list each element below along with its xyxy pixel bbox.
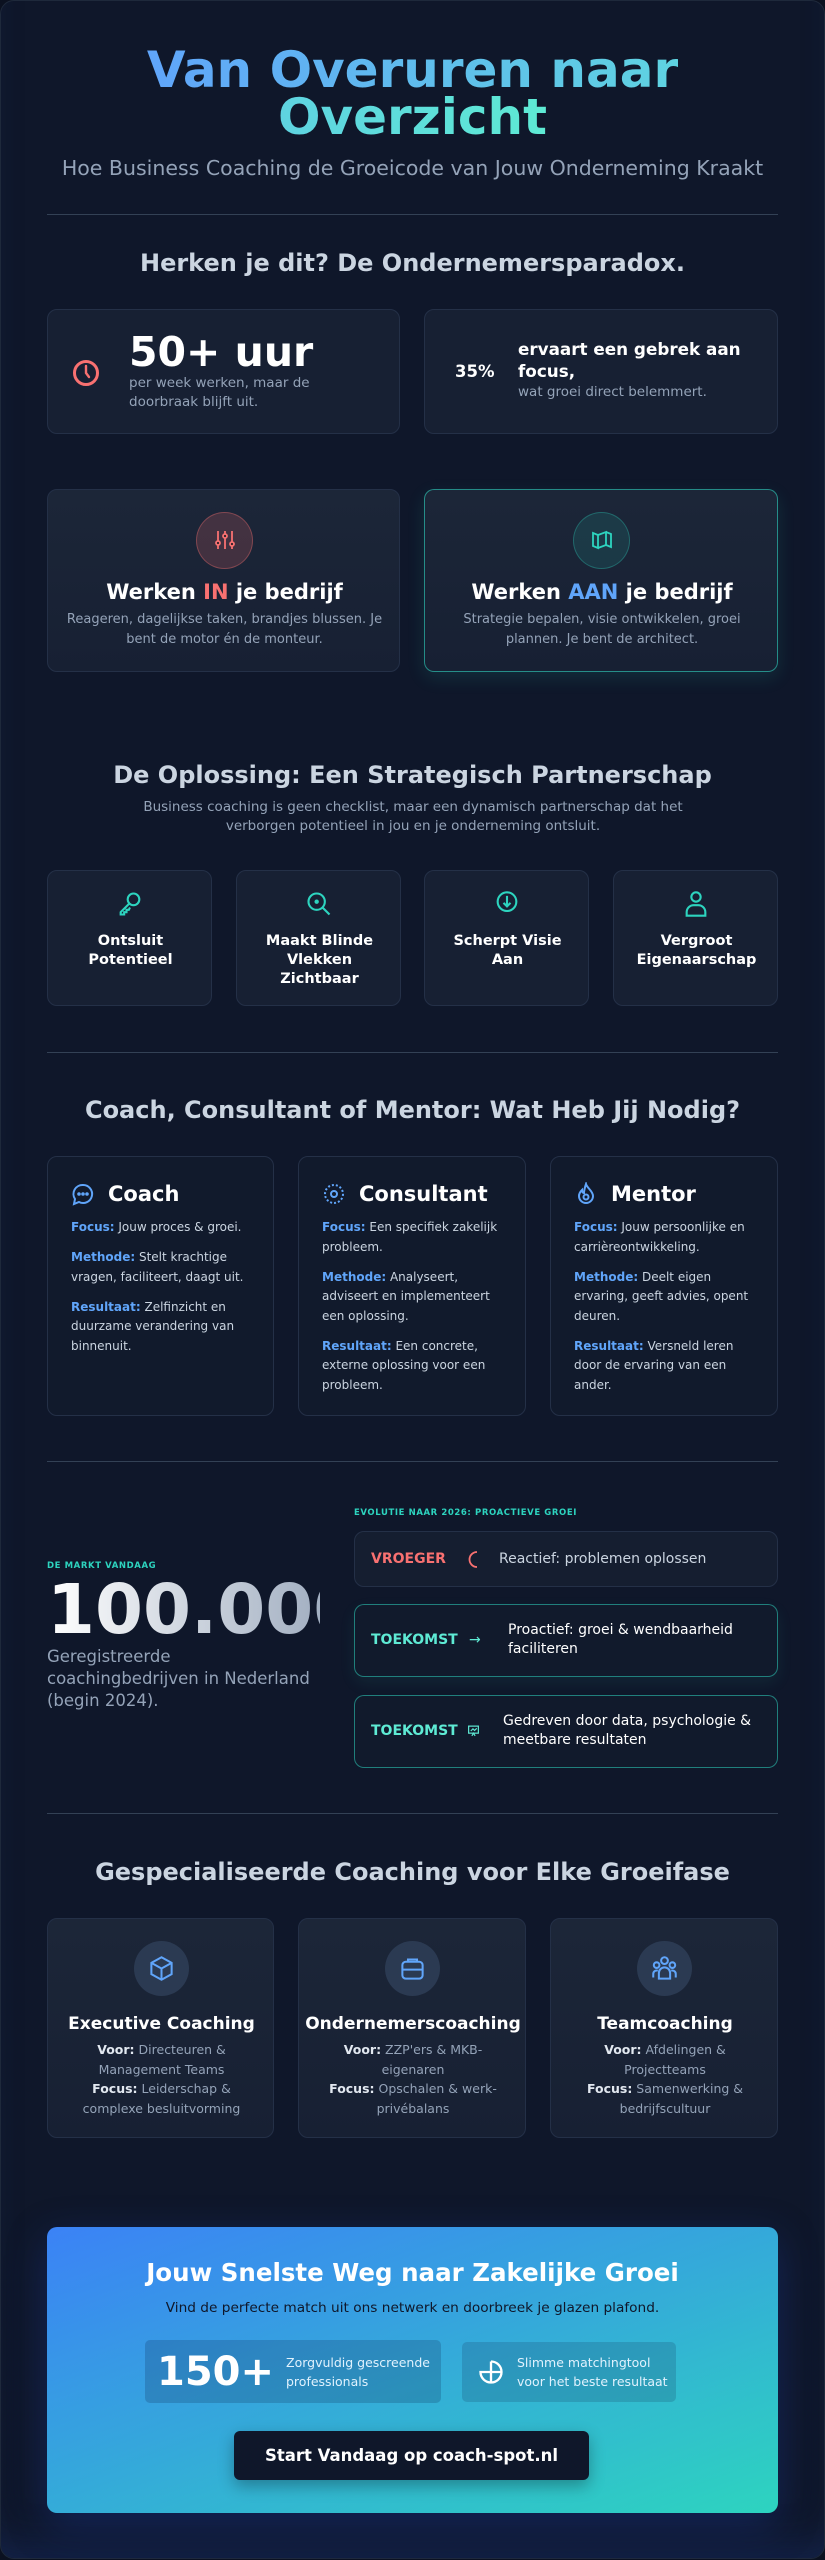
card: toekomst data: TOEKOMST [371, 1723, 458, 1739]
icon: person [686, 891, 706, 917]
stat box: 150+: 150+ [157, 2349, 274, 2395]
evolution timeline [354, 1508, 778, 1768]
icon: compass [496, 891, 518, 912]
stat box: matchingtool: Slimme matchingtool voor het beste resultaat [517, 2355, 668, 2389]
heading: Werken IN je bedrijf [106, 580, 343, 604]
details: Focus: Een specifiek zakelijk probleem. [322, 1220, 497, 1254]
card: werken IN [47, 489, 400, 672]
heading: Werken AAN je bedrijf [471, 580, 733, 604]
card: consultant [298, 1156, 526, 1416]
heading: gespecialiseerde coaching: Gespecialiseerde Coaching voor Elke Groeifase [95, 1858, 730, 1886]
label: Eigenaarschap [637, 952, 756, 968]
stat text: wat groei direct belemmert. [518, 384, 707, 400]
details: Resultaat: Een concrete, externe oplossing voor een probleem. [322, 1338, 485, 1392]
title: Ondernemerscoaching [305, 2014, 521, 2034]
icon: magnifier [307, 892, 330, 916]
details: Voor: ZZP'ers & MKB-eigenaren [344, 2042, 482, 2076]
card: toekomst proactief: → [469, 1632, 481, 1648]
stat text: focus, [518, 361, 575, 381]
details: Focus: Jouw persoonlijke en carrièreontwikkeling. [574, 1220, 745, 1254]
card: toekomst proactief: Proactief: groei & wendbaarheid faciliteren [508, 1622, 733, 1657]
heading: oplossing: De Oplossing: Een Strategisch Partnerschap [113, 761, 712, 789]
stat text [518, 339, 741, 400]
description [47, 1647, 310, 1710]
stat box: 150+: Zorgvuldig gescreende professionals [286, 2355, 430, 2389]
stat box: 150+ [145, 2340, 441, 2403]
card: 50+ uur [47, 309, 400, 434]
CTA heading: Jouw Snelste Weg naar Zakelijke Groei [146, 2258, 679, 2287]
CTA panel [47, 2227, 778, 2513]
label: Scherpt Visie [453, 933, 562, 949]
card: coach [47, 1156, 274, 1416]
label: Potentieel [88, 952, 173, 968]
card: vroeger: Reactief: problemen oplossen [499, 1551, 706, 1567]
subtitle: Hoe Business Coaching de Groeicode van Jouw Onderneming Kraakt [62, 156, 763, 180]
details [587, 2042, 743, 2116]
icon: sliders [196, 512, 253, 569]
card: toekomst data: Gedreven door data, psychologie & meetbare resultaten [503, 1713, 751, 1748]
label: DE MARKT VANDAAG [47, 1561, 156, 1571]
label: Vergroot [661, 933, 732, 949]
stat number: 35% [455, 362, 494, 381]
title: Van Overuren naar [147, 41, 678, 99]
label [637, 933, 756, 968]
card: visie [424, 870, 589, 1006]
label: Maakt Blinde [266, 933, 373, 949]
details: Voor: Afdelingen & Projectteams [604, 2042, 726, 2076]
card: ontsluit potentieel [47, 870, 212, 1006]
label [453, 933, 562, 968]
stat text: 50+ uur [129, 328, 313, 376]
heading: paradox: Herken je dit? De Ondernemersparadox. [140, 249, 685, 277]
title: Teamcoaching [597, 2014, 733, 2034]
icon: map [573, 512, 630, 569]
details: Resultaat: Zelfinzicht en duurzame verandering van binnenuit. [71, 1300, 234, 1352]
intro text: Business coaching is geen checklist, maar een dynamisch partnerschap dat het verborgen potentieel in jou en je onderneming ontsluit. [143, 799, 683, 834]
stat box: matchingtool [462, 2342, 676, 2402]
details: Focus: Leiderschap & complexe besluitvorming [83, 2081, 240, 2116]
card: 35% [424, 309, 778, 434]
label: Vlekken [287, 952, 352, 968]
title with icon [72, 1182, 179, 1206]
card: toekomst proactief: TOEKOMST [371, 1632, 458, 1648]
card: executive coaching [47, 1918, 274, 2138]
description: Strategie bepalen, visie ontwikkelen, groei plannen. Je bent de architect. [463, 612, 741, 647]
card: toekomst proactief [354, 1604, 778, 1677]
details [83, 2042, 240, 2116]
details: Resultaat: Versneld leren door de ervaring van een ander. [574, 1338, 733, 1392]
stat text [129, 328, 314, 410]
details: Voor: Directeuren & Management Teams [97, 2042, 226, 2076]
icon: briefcase [385, 1941, 440, 1996]
CTA subtext: Vind de perfecte match uit ons netwerk en doorbreek je glazen plafond. [166, 2300, 659, 2316]
stat text: doorbraak blijft uit. [129, 394, 258, 410]
details [574, 1220, 748, 1392]
description: Reageren, dagelijkse taken, brandjes blussen. Je bent de motor én de monteur. [67, 612, 382, 647]
label [266, 933, 373, 987]
label: Zichtbaar [280, 971, 359, 987]
card: vroeger [354, 1531, 778, 1587]
icon: clock [73, 360, 99, 386]
CTA button: Start Vandaag op coach-spot.nl [265, 2446, 558, 2465]
details [71, 1220, 243, 1352]
CTA button [234, 2431, 589, 2480]
icon: cube [134, 1941, 189, 1996]
market stat [47, 1561, 320, 1710]
icon: key [120, 892, 140, 916]
description: Geregistreerde [47, 1647, 170, 1666]
details: Focus: Samenwerking & bedrijfscultuur [587, 2081, 743, 2116]
description: (begin 2024). [47, 1691, 158, 1710]
details: Focus: Opschalen & werk-privébalans [329, 2081, 497, 2116]
card: mentor [550, 1156, 778, 1416]
card: toekomst data [354, 1695, 778, 1768]
card: blinde vlekken [236, 870, 401, 1006]
label [88, 933, 173, 968]
details [329, 2042, 497, 2116]
description: coachingbedrijven in Nederland [47, 1669, 310, 1688]
card: eigenaarschap [613, 870, 778, 1006]
title with icon: Mentor [611, 1182, 696, 1206]
details: Methode: Deelt eigen ervaring, geeft advies, opent deuren. [574, 1270, 748, 1322]
label: Aan [492, 952, 523, 968]
label: EVOLUTIE NAAR 2026: PROACTIEVE GROEI [354, 1508, 577, 1518]
details: Focus: Jouw proces & groei. [71, 1220, 242, 1234]
card: werken AAN [424, 489, 778, 672]
title: Executive Coaching [68, 2014, 255, 2034]
details: Methode: Analyseert, adviseert en implementeert een oplossing. [322, 1270, 490, 1322]
stat text: ervaart een gebrek aan [518, 339, 741, 359]
details [322, 1220, 498, 1392]
card: vroeger: VROEGER [371, 1551, 446, 1567]
title: Overzicht [278, 88, 547, 146]
stat text: per week werken, maar de [129, 375, 310, 391]
title with icon: Consultant [359, 1182, 488, 1206]
title [147, 41, 678, 146]
title with icon: Coach [108, 1182, 179, 1206]
heading: coach consultant mentor: Coach, Consultant of Mentor: Wat Heb Jij Nodig? [85, 1096, 740, 1124]
icon: team [637, 1941, 692, 1996]
card: ondernemerscoaching [298, 1918, 526, 2138]
card: teamcoaching [550, 1918, 778, 2138]
label: Ontsluit [98, 933, 163, 949]
details: Methode: Stelt krachtige vragen, faciliteert, daagt uit. [71, 1250, 243, 1284]
